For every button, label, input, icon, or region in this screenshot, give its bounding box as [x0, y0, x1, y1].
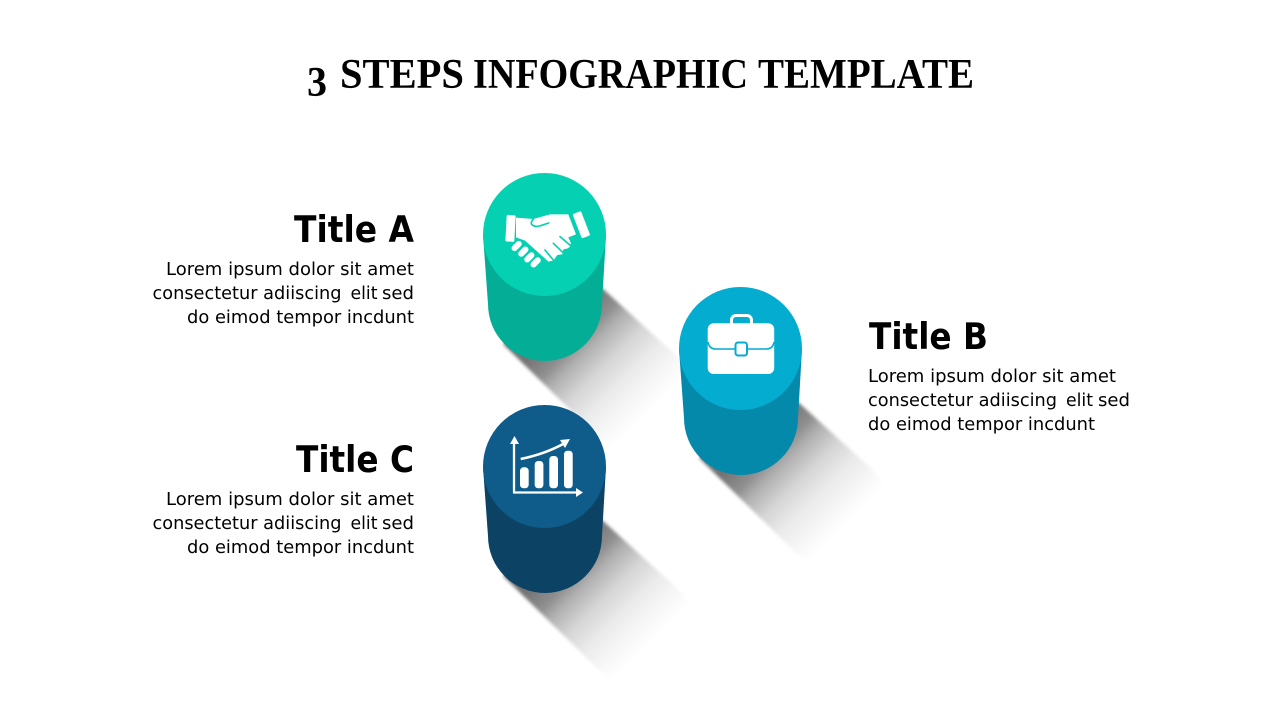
cylinder top C: [483, 405, 606, 528]
long shadow A: [503, 288, 692, 451]
cylinder top A: [483, 173, 606, 296]
title: TEMPLATE: [758, 51, 974, 98]
panel: step C text: [152, 438, 414, 558]
cylinder body B: [679, 349, 802, 475]
icon: briefcase: [708, 316, 774, 374]
text block: step A description: do eimod tempor incdunt: [187, 307, 414, 328]
cylinder body A: [483, 235, 606, 361]
heading: Title C: Title C: [296, 438, 414, 481]
text block: step A description: Lorem ipsum dolor sit amet: [166, 259, 414, 280]
icon: handshake: [505, 211, 590, 269]
long shadow C: [503, 520, 692, 683]
long shadow B: [699, 402, 888, 565]
text block: step C description: [152, 489, 414, 558]
text block: step B description: [868, 366, 1130, 435]
text block: step A description: elit: [350, 283, 378, 304]
text block: step A description: [152, 259, 414, 328]
title: STEPS: [340, 51, 464, 98]
title: [307, 51, 974, 106]
icon: bar chart: [510, 436, 583, 497]
text block: step B description: do eimod tempor incdunt: [868, 414, 1095, 435]
panel: cylinder B: [679, 287, 888, 565]
title: INFOGRAPHIC: [473, 51, 748, 98]
panel: step B text: [868, 315, 1130, 435]
panel: cylinder A: [483, 173, 692, 451]
heading: Title B: Title B: [869, 315, 988, 358]
text block: step C description: do eimod tempor incdunt: [187, 537, 414, 558]
title: 3: [307, 59, 327, 106]
text block: step A description: consectetur adiiscing: [152, 283, 342, 304]
panel: cylinder C: [483, 405, 692, 683]
cylinder top B: [679, 287, 802, 410]
text block: step B description: consectetur adiiscing: [868, 390, 1057, 411]
text block: step A description: sed: [382, 283, 414, 304]
text block: step B description: sed: [1098, 390, 1130, 411]
text block: step B description: elit: [1066, 390, 1093, 411]
heading: Title A: Title A: [294, 208, 415, 251]
panel: step A text: [152, 208, 415, 328]
text block: step C description: elit: [350, 513, 378, 534]
text block: step C description: sed: [382, 513, 414, 534]
cylinder body C: [483, 467, 606, 593]
text block: step C description: consectetur adiiscing: [152, 513, 342, 534]
text block: step B description: Lorem ipsum dolor sit amet: [868, 366, 1116, 387]
text block: step C description: Lorem ipsum dolor sit amet: [166, 489, 414, 510]
